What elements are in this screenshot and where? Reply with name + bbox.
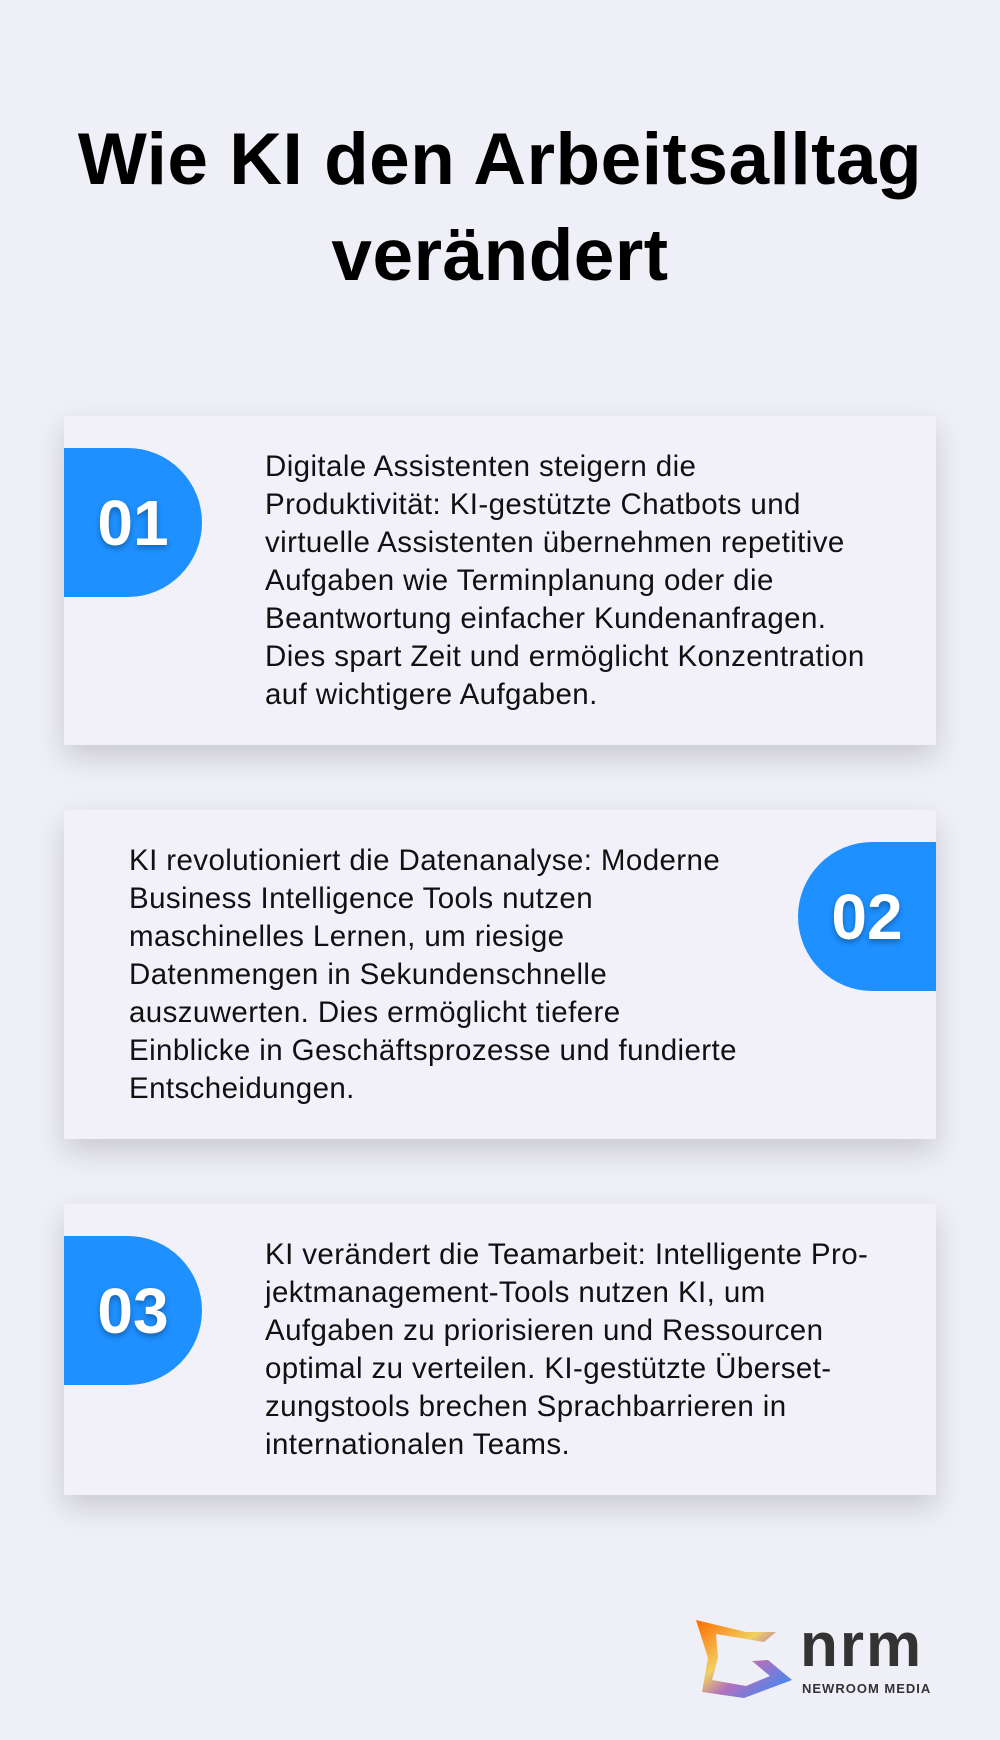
logo — [696, 1611, 931, 1698]
icon: logo mark — [696, 1620, 792, 1698]
title: Wie KI den Arbeitsalltag — [78, 119, 922, 200]
text 1: Produktivität: KI-gestützte Chatbots und — [265, 488, 801, 521]
title — [78, 119, 922, 296]
text 3 — [264, 1238, 868, 1461]
text 1: auf wichtigere Aufgaben. — [265, 678, 598, 711]
panel: card 1 — [64, 416, 936, 745]
text 2: Business Intelligence Tools nutzen — [129, 882, 593, 915]
text 2: auszuwerten. Dies ermöglicht tiefere — [129, 996, 621, 1029]
text 1 — [265, 450, 865, 711]
text 1: Dies spart Zeit und ermöglicht Konzentration — [265, 640, 865, 673]
badge 01: 01 — [97, 486, 169, 558]
logo: NEWROOM MEDIA — [802, 1681, 931, 1696]
text 3: internationalen Teams. — [265, 1428, 570, 1461]
badge 02 — [798, 842, 936, 991]
badge 01 — [64, 448, 202, 597]
panel: card 2 — [64, 810, 936, 1139]
text 2: Datenmengen in Sekundenschnelle — [129, 958, 607, 991]
text 1: Digitale Assistenten steigern die — [265, 450, 696, 483]
text 3: zungstools brechen Sprachbarrieren in — [265, 1390, 787, 1423]
badge 02: 02 — [831, 880, 903, 952]
text 1: virtuelle Assistenten übernehmen repetitive — [265, 526, 845, 559]
text 3: Aufgaben zu priorisieren und Ressourcen — [265, 1314, 823, 1347]
badge 03 — [64, 1236, 202, 1385]
text 3: KI verändert die Teamarbeit: Intelligente Pro- — [265, 1238, 868, 1271]
text 2: Entscheidungen. — [129, 1072, 355, 1105]
text 2: Einblicke in Geschäftsprozesse und fundierte — [129, 1034, 737, 1067]
title: verändert — [331, 215, 669, 296]
badge 03: 03 — [97, 1274, 169, 1346]
panel: card 3 — [64, 1204, 936, 1495]
logo text: nrm — [800, 1611, 923, 1680]
text 2 — [129, 844, 737, 1105]
text 2: maschinelles Lernen, um riesige — [129, 920, 564, 953]
text 3: optimal zu verteilen. KI-gestützte Überset- — [265, 1352, 831, 1385]
text 1: Beantwortung einfacher Kundenanfragen. — [265, 602, 826, 635]
text 2: KI revolutioniert die Datenanalyse: Moderne — [129, 844, 720, 877]
text 1: Aufgaben wie Terminplanung oder die — [265, 564, 774, 597]
text 3: jektmanagement-Tools nutzen KI, um — [265, 1276, 766, 1309]
